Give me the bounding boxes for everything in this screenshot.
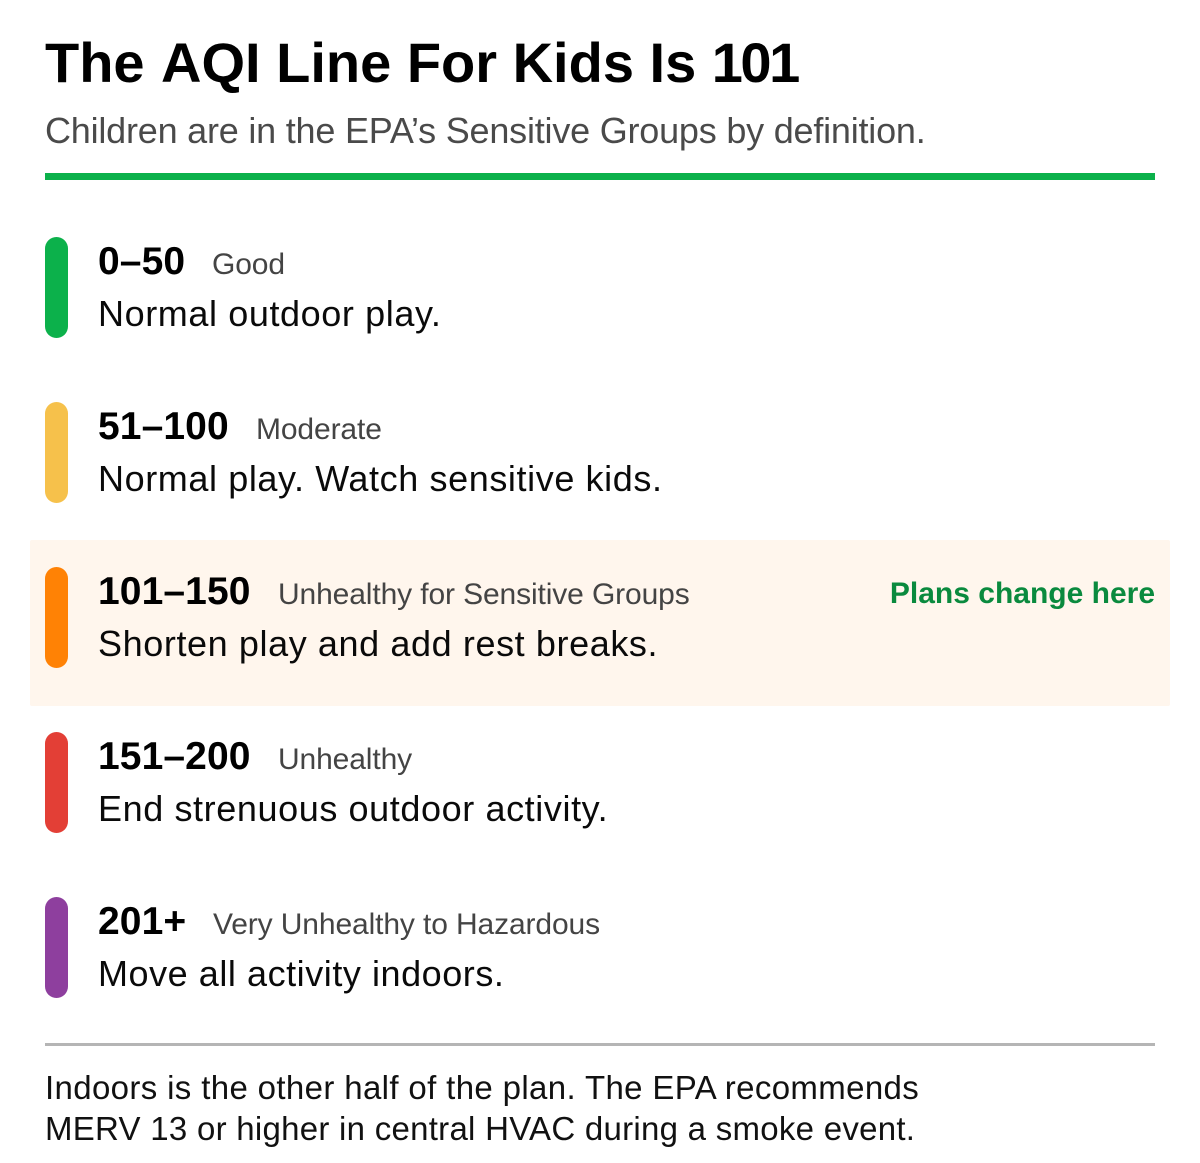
range: 101–150 <box>98 570 251 613</box>
range: 201+ <box>98 900 186 943</box>
action: Shorten play and add rest breaks. <box>98 623 658 664</box>
highlight band <box>30 540 1170 706</box>
green header rule <box>45 173 1155 180</box>
action: Normal play. Watch sensitive kids. <box>98 458 663 499</box>
action: Normal outdoor play. <box>98 293 442 334</box>
footer note <box>45 1069 919 1147</box>
row: 201+ Very Unhealthy to Hazardous <box>45 897 600 998</box>
subtitle: Children are in the EPA’s Sensitive Groups by definition. <box>45 110 926 151</box>
color bar: yellow <box>45 402 68 503</box>
category: Unhealthy for Sensitive Groups <box>278 578 690 611</box>
row: 101-150 Unhealthy for Sensitive Groups <box>45 567 1155 668</box>
callout: Plans change here <box>890 577 1155 610</box>
row: 151-200 Unhealthy <box>45 732 608 833</box>
color bar: purple <box>45 897 68 998</box>
range: 0–50 <box>98 240 185 283</box>
color bar: orange <box>45 567 68 668</box>
row: 51-100 Moderate <box>45 402 663 503</box>
action: Move all activity indoors. <box>98 953 504 994</box>
category: Moderate <box>256 413 382 446</box>
color bar: red <box>45 732 68 833</box>
action: End strenuous outdoor activity. <box>98 788 608 829</box>
category: Good <box>212 248 285 281</box>
category: Very Unhealthy to Hazardous <box>213 908 600 941</box>
footer note: MERV 13 or higher in central HVAC during a smoke event. <box>45 1110 915 1147</box>
category: Unhealthy <box>278 743 412 776</box>
footer rule <box>45 1043 1155 1046</box>
range: 151–200 <box>98 735 251 778</box>
color bar: green <box>45 237 68 338</box>
row: 0-50 Good <box>45 237 442 338</box>
title: The AQI Line For Kids Is 101 <box>45 31 798 94</box>
range: 51–100 <box>98 405 229 448</box>
footer note: Indoors is the other half of the plan. The EPA recommends <box>45 1069 919 1106</box>
